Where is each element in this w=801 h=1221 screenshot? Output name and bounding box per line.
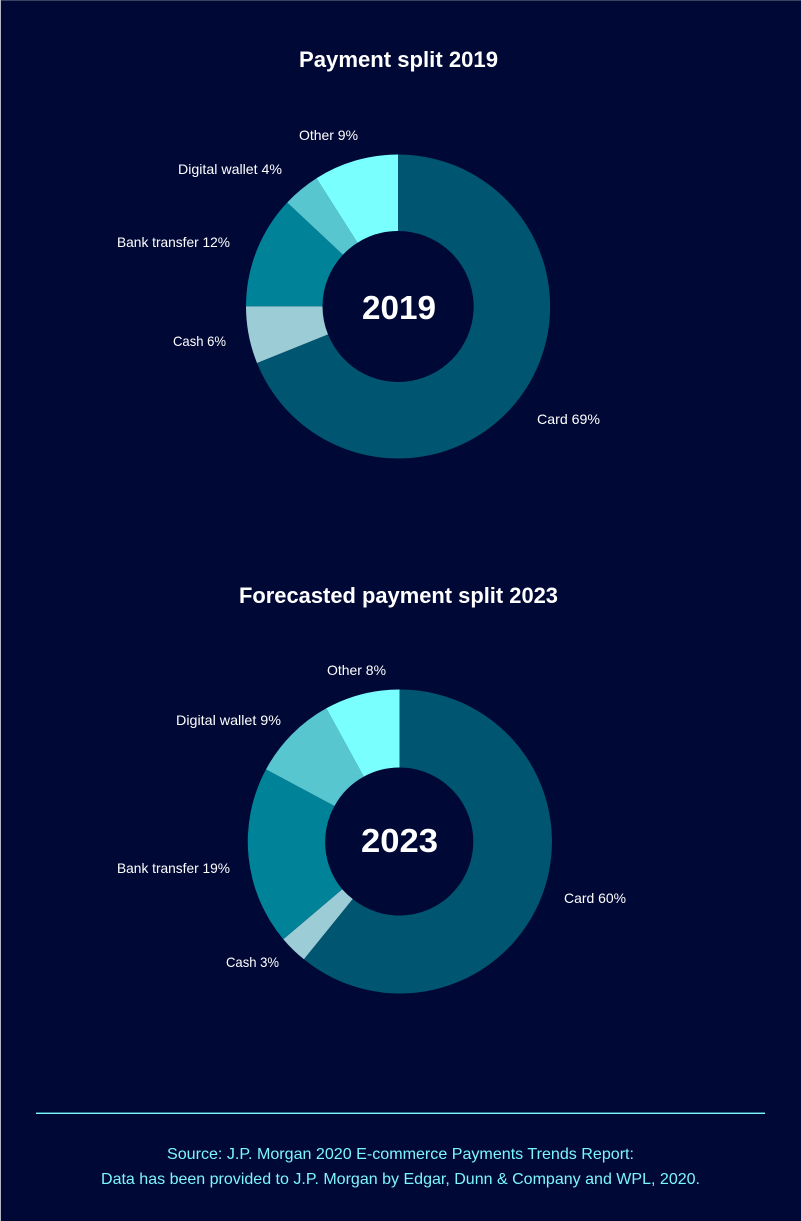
source text: Source: J.P. Morgan 2020 E-commerce Payments Trends Report:: [167, 1146, 634, 1163]
label: Card 69%: Card 69%: [537, 411, 600, 427]
label: Cash 6%: Cash 6%: [173, 333, 226, 349]
label: Card 60%: Card 60%: [564, 890, 626, 906]
title: Payment split 2019: Payment split 2019: [299, 47, 498, 72]
label: Bank transfer 12%: Bank transfer 12%: [117, 234, 230, 250]
source text: Data has been provided to J.P. Morgan by Edgar, Dunn & Company and WPL, 2020.: [101, 1171, 700, 1188]
label: Other 9%: Other 9%: [299, 127, 358, 143]
segment: Other 9%: [316, 154, 398, 243]
segment: Cash 6%: [246, 306, 328, 363]
donut chart: 2019: [246, 154, 550, 459]
segment: Cash 3%: [283, 889, 353, 959]
label: Bank transfer 19%: Bank transfer 19%: [117, 860, 230, 876]
label: Cash 3%: Cash 3%: [226, 954, 279, 970]
segment: Other 8%: [326, 690, 400, 777]
donut chart: 2023: [248, 689, 552, 993]
label: Other 8%: Other 8%: [327, 662, 386, 678]
segment: Card 60%: [304, 689, 552, 993]
segment: Digital wallet 9%: [266, 708, 364, 806]
chart centre label: 2023: 2023: [361, 822, 438, 859]
label: Digital wallet 9%: Digital wallet 9%: [176, 712, 281, 728]
chart centre label: 2019: 2019: [362, 289, 436, 326]
segment: Card 69%: [257, 154, 550, 459]
title: Forecasted payment split 2023: Forecasted payment split 2023: [239, 583, 558, 608]
label: Digital wallet 4%: Digital wallet 4%: [178, 161, 282, 177]
segment: Digital wallet 4%: [287, 178, 358, 255]
segment: Bank transfer 19%: [248, 769, 342, 939]
segment: Bank transfer 12%: [246, 202, 343, 306]
source text: [101, 1146, 700, 1188]
